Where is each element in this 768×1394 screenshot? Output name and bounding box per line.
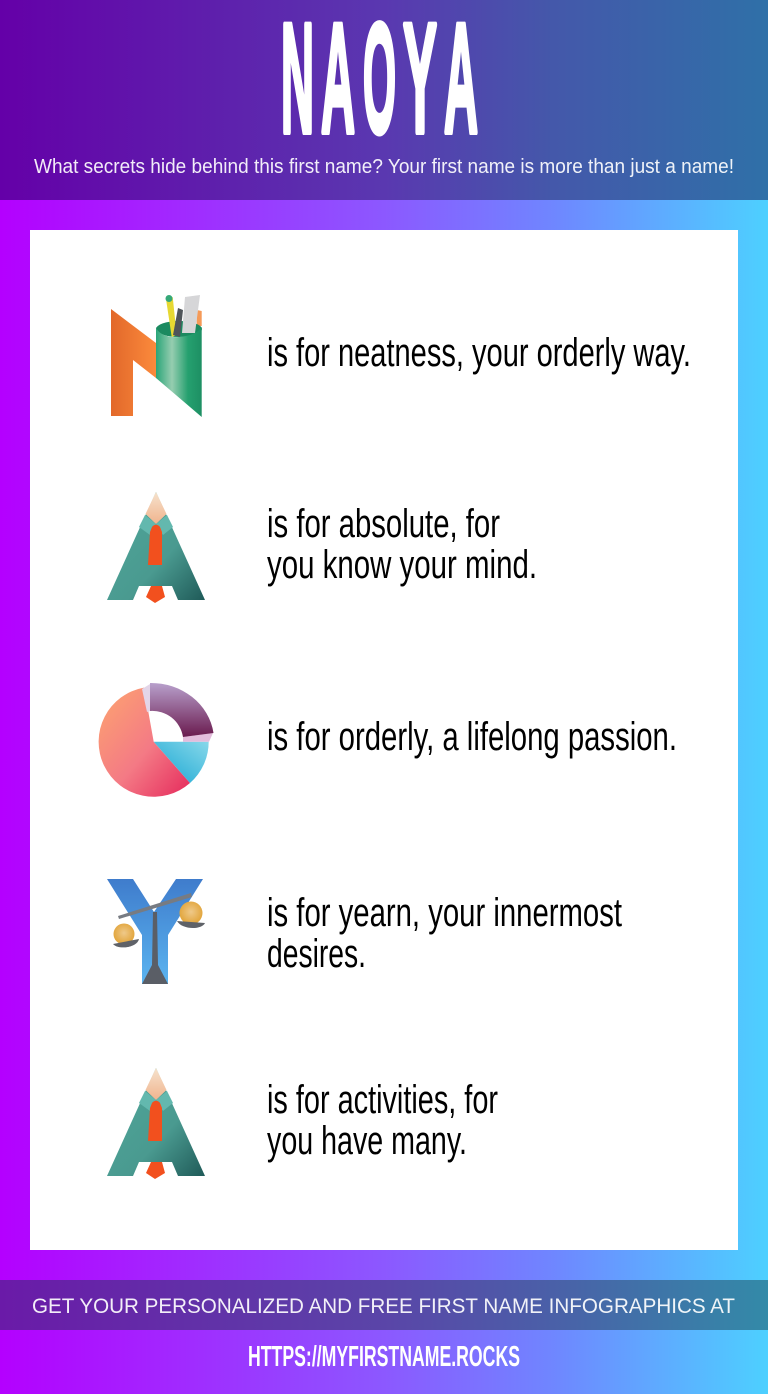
text: you know your mind: you know your mind. (267, 543, 537, 587)
text: you have many: you have many. (267, 1119, 467, 1163)
text: desires: desires. (267, 932, 366, 976)
text: activities: is for activities, for (267, 1078, 498, 1122)
icon: N with pencil cup (111, 295, 202, 417)
subtitle: What secrets hide behind this first name? Your first name is more than just a name! (34, 156, 734, 178)
footer call to action: GET YOUR PERSONALIZED AND FREE FIRST NAME INFOGRAPHICS AT (32, 1294, 735, 1318)
icon: Y with scales (107, 879, 205, 984)
icon: A with tie second (107, 1068, 205, 1179)
footer url: HTTPS://MYFIRSTNAME.ROCKS (248, 1341, 520, 1373)
row: letter O (99, 683, 677, 797)
header band (0, 0, 768, 200)
text: yearn: is for yearn, your innermost (267, 891, 622, 935)
icon: pie chart O (99, 683, 214, 797)
title (281, 0, 478, 166)
row: letter A (107, 492, 537, 603)
footer band (0, 1280, 768, 1330)
text: absolute: is for absolute, for (267, 502, 500, 546)
row: letter Y (107, 879, 622, 984)
row: letter A second (107, 1068, 498, 1179)
row: letter N (111, 295, 691, 417)
icon: A with tie (107, 492, 205, 603)
white content panel (30, 230, 738, 1250)
